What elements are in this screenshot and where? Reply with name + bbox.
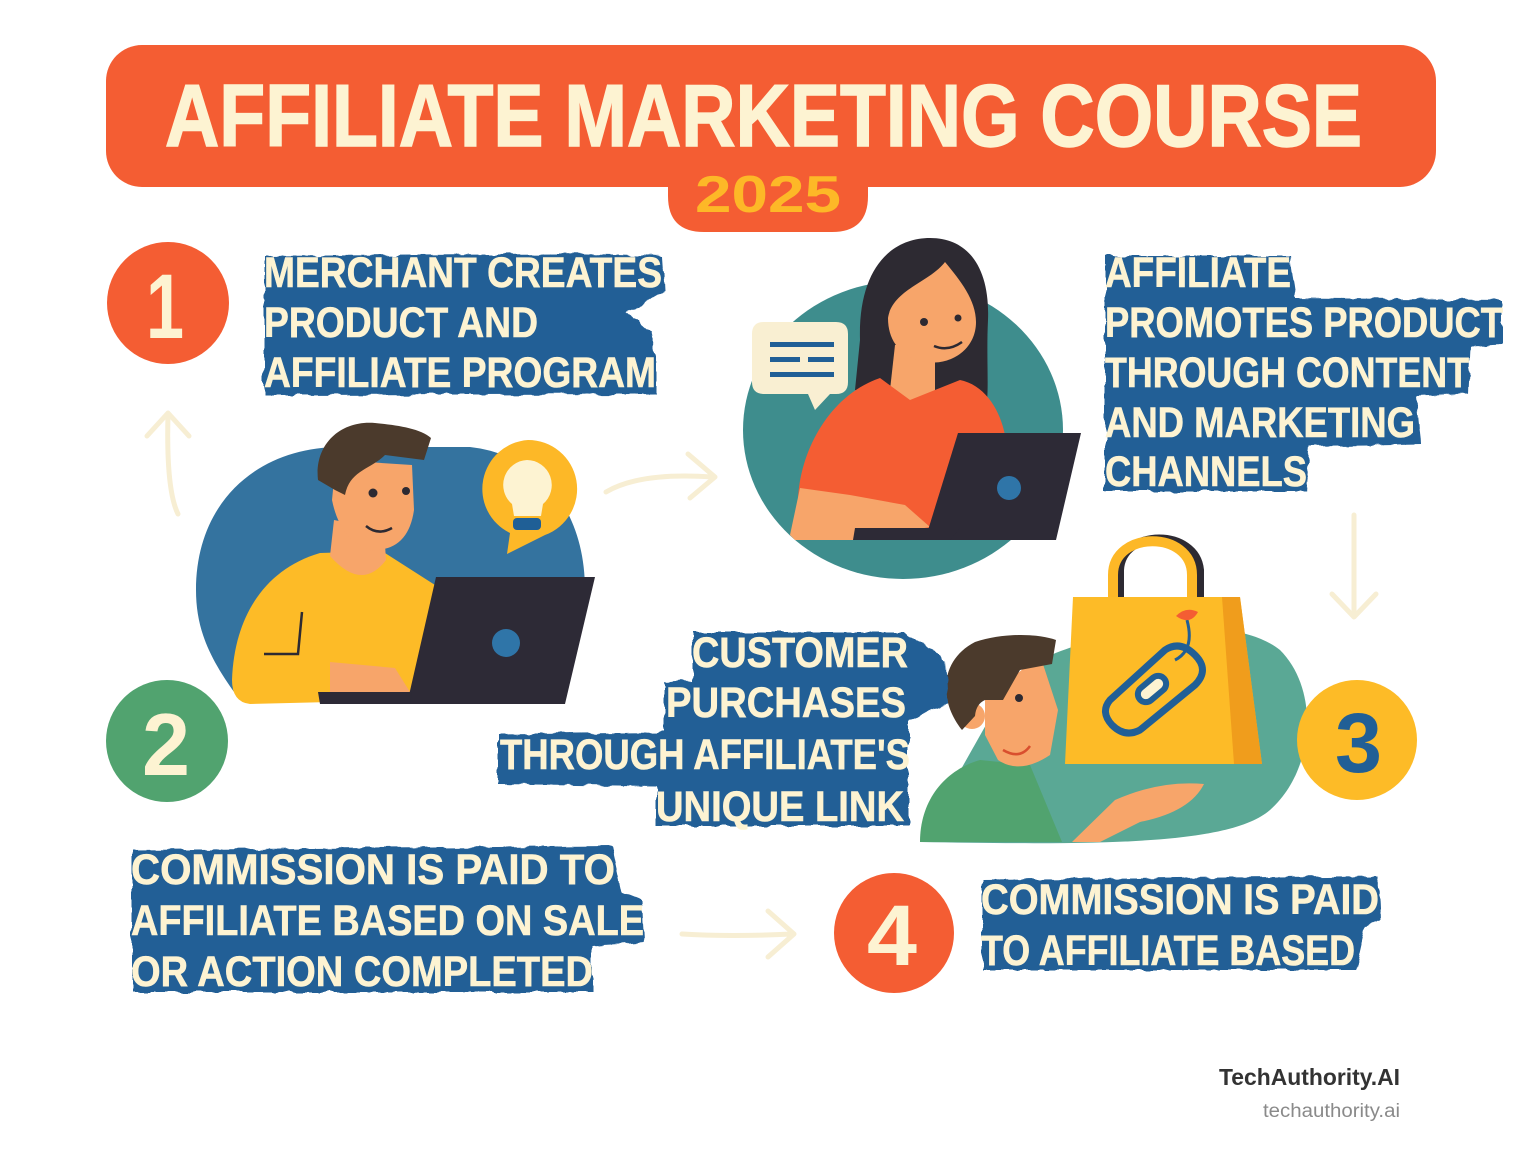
illustration: merchant with laptop: [196, 423, 595, 704]
step 4 left text: commission: [131, 846, 644, 996]
step 3 badge: 3: [1335, 696, 1382, 790]
step 4 left text: commission: AFFILIATE BASED ON SALE: [131, 897, 644, 945]
icon: speech bubble: [752, 322, 848, 410]
step 4 badge: 4: [867, 888, 917, 984]
step 2 text: affiliate promotes: AND MARKETING: [1105, 399, 1415, 447]
step 4 right text: COMMISSION IS PAID: [981, 876, 1379, 924]
arrow: to step 4: [682, 911, 794, 957]
step 4 left text: commission: COMMISSION IS PAID TO: [131, 846, 615, 894]
step 2 text: affiliate promotes: CHANNELS: [1105, 448, 1307, 496]
arrow: step 1 illustration to affiliate: [606, 454, 715, 498]
brand name: TechAuthority.AI: [1219, 1064, 1400, 1090]
step 3 text: customer purchases: THROUGH AFFILIATE'S: [500, 731, 910, 779]
arrow: step 2 up to step 1: [147, 413, 189, 514]
brand url: techauthority.ai: [1263, 1101, 1400, 1122]
illustration: affiliate with laptop: [743, 238, 1081, 579]
illustration: customer with shopping bag: [920, 538, 1307, 843]
title: AFFILIATE MARKETING COURSE: [165, 66, 1362, 165]
step 1 text: [264, 249, 664, 397]
step 2 text: affiliate promotes: AFFILIATE: [1105, 249, 1291, 297]
step 2 badge: [106, 680, 228, 802]
step 1 text: PRODUCT AND: [264, 299, 538, 347]
icon: light bulb pin: [482, 440, 577, 554]
step 1 badge: [107, 242, 229, 364]
step 2 text: affiliate promotes: [1105, 249, 1503, 496]
step 1 text: AFFILIATE PROGRAM: [264, 349, 656, 397]
step 2 badge: 2: [142, 695, 190, 794]
step 4 badge: [834, 873, 954, 993]
step 4 right text: [981, 876, 1380, 975]
step 3 badge: [1297, 680, 1417, 800]
icon: price tag: [1105, 610, 1202, 733]
step 4 left text: commission: OR ACTION COMPLETED: [131, 948, 593, 996]
title banner: [106, 45, 1436, 232]
step 2 text: affiliate promotes: THROUGH CONTENT: [1105, 349, 1469, 397]
step 3 text: customer purchases: UNIQUE LINK: [656, 783, 904, 831]
step 3 text: customer purchases: CUSTOMER: [692, 629, 908, 677]
year: 2025: [695, 166, 841, 224]
step 4 right text: TO AFFILIATE BASED: [981, 927, 1355, 975]
step 1 badge: 1: [146, 256, 184, 358]
step 3 text: customer purchases: PURCHASES: [666, 679, 906, 727]
step 1 text: MERCHANT CREATES: [264, 249, 662, 297]
step 3 text: customer purchases: [498, 629, 948, 831]
arrow: down to step 3: [1332, 515, 1376, 617]
